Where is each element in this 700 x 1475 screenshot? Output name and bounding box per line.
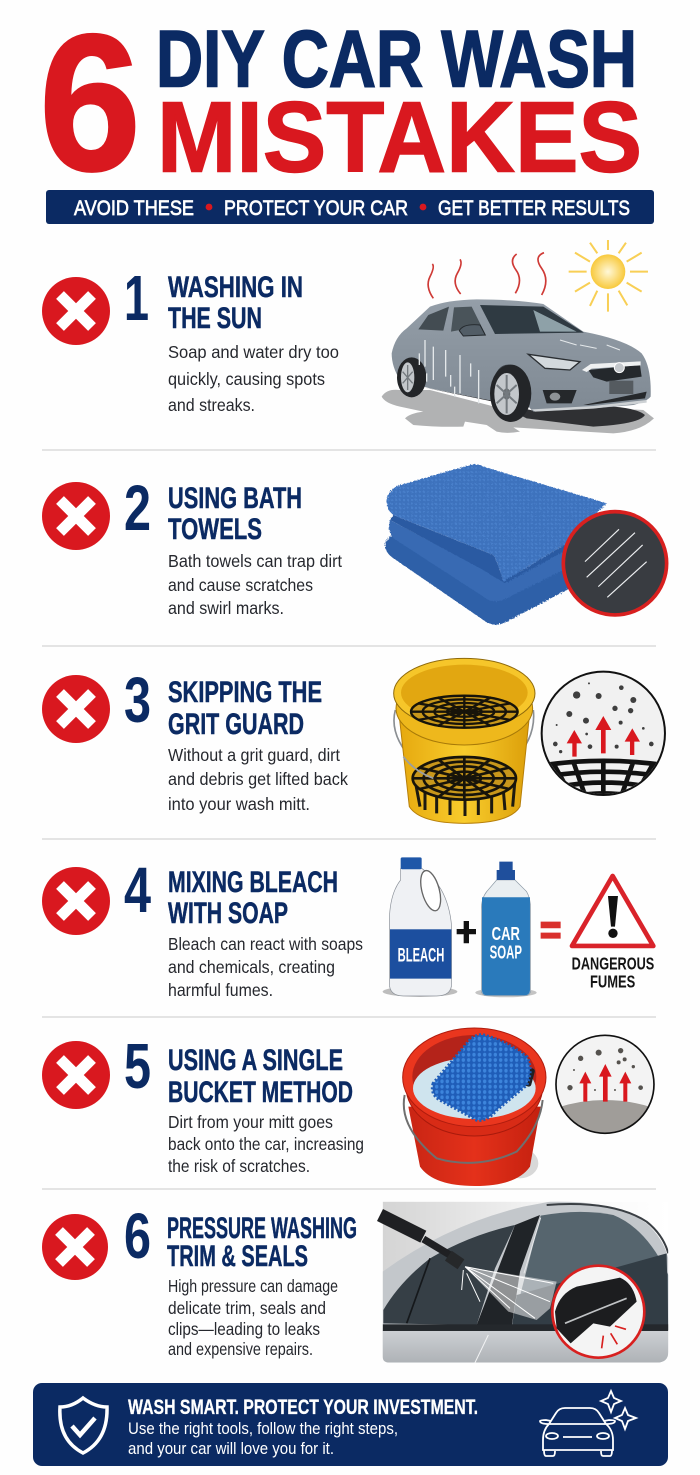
bucket shadow <box>502 1148 538 1178</box>
number 5: 5 <box>124 1030 151 1102</box>
illustration: pressure washer on car window trim <box>380 1202 668 1363</box>
pressure wand <box>380 1215 461 1264</box>
body text: back onto the car, increasing <box>168 1134 364 1154</box>
icon: red x <box>42 867 110 935</box>
number 2: 2 <box>124 472 151 544</box>
heading <box>168 1044 353 1109</box>
body text: and streaks. <box>168 395 255 415</box>
handle back <box>394 710 534 778</box>
icon: red x <box>42 277 110 345</box>
scratch inset <box>563 512 667 615</box>
wash mitt <box>432 1035 535 1120</box>
subtitle banner: PROTECT YOUR CAR <box>224 197 408 220</box>
heading: PRESSURE WASHING <box>167 1212 357 1245</box>
bleach bottle <box>383 857 457 997</box>
heading line: MISTAKES: MISTAKES <box>157 82 642 194</box>
heading <box>168 676 322 741</box>
footer heading: WASH SMART. PROTECT YOUR INVESTMENT. <box>128 1396 478 1419</box>
icon: red x <box>42 482 110 550</box>
warning label <box>572 953 654 991</box>
footer banner <box>33 1383 668 1466</box>
panel: mistake 4 mixing bleach with soap <box>42 854 654 1000</box>
title <box>39 0 642 212</box>
icon: red x <box>42 1214 108 1280</box>
body text: quickly, causing spots <box>168 369 325 389</box>
handle front <box>403 757 433 778</box>
body text: Bleach can react with soaps <box>168 934 363 954</box>
heading: TRIM & SEALS <box>167 1240 308 1273</box>
body text: High pressure can damage <box>168 1276 338 1296</box>
footer body: Use the right tools, follow the right steps, <box>128 1419 398 1438</box>
heading: TOWELS <box>168 513 262 546</box>
lower grit guard <box>415 780 515 816</box>
inset: damaged trim <box>552 1266 644 1358</box>
body text: Without a grit guard, dirt <box>168 745 340 765</box>
body text: and cause scratches <box>168 575 313 595</box>
body text: clips—leading to leaks <box>168 1319 320 1339</box>
car photo area <box>383 1202 668 1363</box>
heading: WASHING IN <box>168 271 303 304</box>
heading: SKIPPING THE <box>168 676 322 709</box>
water spray <box>462 1267 557 1320</box>
illustration: gray car in sun <box>382 240 654 433</box>
body text: Dirt from your mitt goes <box>168 1112 333 1132</box>
icon: red x <box>42 675 110 743</box>
heading: THE SUN <box>168 302 262 335</box>
body text: and swirl marks. <box>168 598 284 618</box>
bleach bottle: BLEACH <box>398 946 444 967</box>
heading: USING A SINGLE <box>168 1044 343 1077</box>
icon: red x <box>42 1041 110 1109</box>
car soap bottle <box>475 862 537 997</box>
body text: delicate trim, seals and <box>168 1298 326 1318</box>
car <box>382 299 654 433</box>
heading: USING BATH <box>168 482 302 515</box>
icon: car with sparkles <box>540 1391 636 1456</box>
panel: mistake 1 washing in the sun <box>42 240 654 433</box>
heat waves and sun <box>428 240 648 312</box>
illustration: bleach plus car soap equals dangerous fumes <box>383 857 654 997</box>
panel: mistake 6 pressure washing trim and seals <box>42 1200 668 1363</box>
warning label: DANGEROUS <box>572 953 654 973</box>
body text: Soap and water dry too <box>168 342 339 362</box>
heading <box>168 866 338 930</box>
equals sign <box>541 922 561 939</box>
warning triangle <box>572 876 653 946</box>
body text: Bath towels can trap dirt <box>168 551 342 571</box>
body text <box>168 1112 364 1176</box>
inset: dirt lifted through net <box>542 672 665 800</box>
subtitle banner <box>46 190 654 224</box>
number 6: 6 <box>124 1200 151 1272</box>
number 3: 3 <box>124 664 151 736</box>
bucket rim <box>394 658 535 728</box>
body text <box>168 1276 338 1359</box>
subtitle banner: AVOID THESE <box>74 197 194 220</box>
body text <box>168 342 339 415</box>
heading: GRIT GUARD <box>168 708 304 741</box>
upper grit guard <box>411 696 518 728</box>
bucket lip <box>396 672 533 745</box>
body text <box>168 934 363 1000</box>
plus sign <box>457 921 476 943</box>
water <box>413 1058 536 1119</box>
illustration: folded blue towel with scratch inset <box>385 464 667 625</box>
body text: into your wash mitt. <box>168 794 310 814</box>
subtitle banner: GET BETTER RESULTS <box>438 197 630 220</box>
body text: and chemicals, creating <box>168 957 335 977</box>
number 4: 4 <box>124 854 151 926</box>
big red number 6: 6 <box>39 0 141 212</box>
body text <box>168 551 342 618</box>
body text: and debris get lifted back <box>168 769 348 789</box>
bucket lip <box>406 1037 543 1136</box>
heading: WITH SOAP <box>168 897 288 930</box>
body text: the risk of scratches. <box>168 1156 310 1176</box>
number 1: 1 <box>124 262 149 334</box>
icon: shield with check <box>60 1398 107 1453</box>
heading: MIXING BLEACH <box>168 866 338 899</box>
heading <box>168 271 303 335</box>
bucket body <box>399 717 529 823</box>
inset: dirt on surface <box>555 1035 655 1137</box>
illustration: red bucket with wash mitt <box>403 1028 655 1186</box>
panel: mistake 3 skipping the grit guard <box>42 658 665 823</box>
illustration: yellow bucket with grit guard <box>394 658 665 823</box>
footer body <box>128 1419 398 1458</box>
body text: and expensive repairs. <box>168 1339 313 1359</box>
heading <box>167 1212 357 1273</box>
footer body: and your car will love you for it. <box>128 1439 334 1458</box>
car soap bottle: SOAP <box>490 941 522 962</box>
heading: BUCKET METHOD <box>168 1076 353 1109</box>
bucket body <box>408 1107 541 1186</box>
body text: harmful fumes. <box>168 980 273 1000</box>
car soap bottle: CAR <box>492 923 520 944</box>
towel <box>385 464 607 625</box>
panel: mistake 2 using bath towels <box>42 464 667 625</box>
rim <box>403 1028 546 1127</box>
warning label: FUMES <box>590 971 635 991</box>
handle <box>404 1095 543 1163</box>
panel: mistake 5 using a single bucket method <box>42 1028 655 1186</box>
heading <box>168 482 302 546</box>
body text <box>168 745 348 814</box>
